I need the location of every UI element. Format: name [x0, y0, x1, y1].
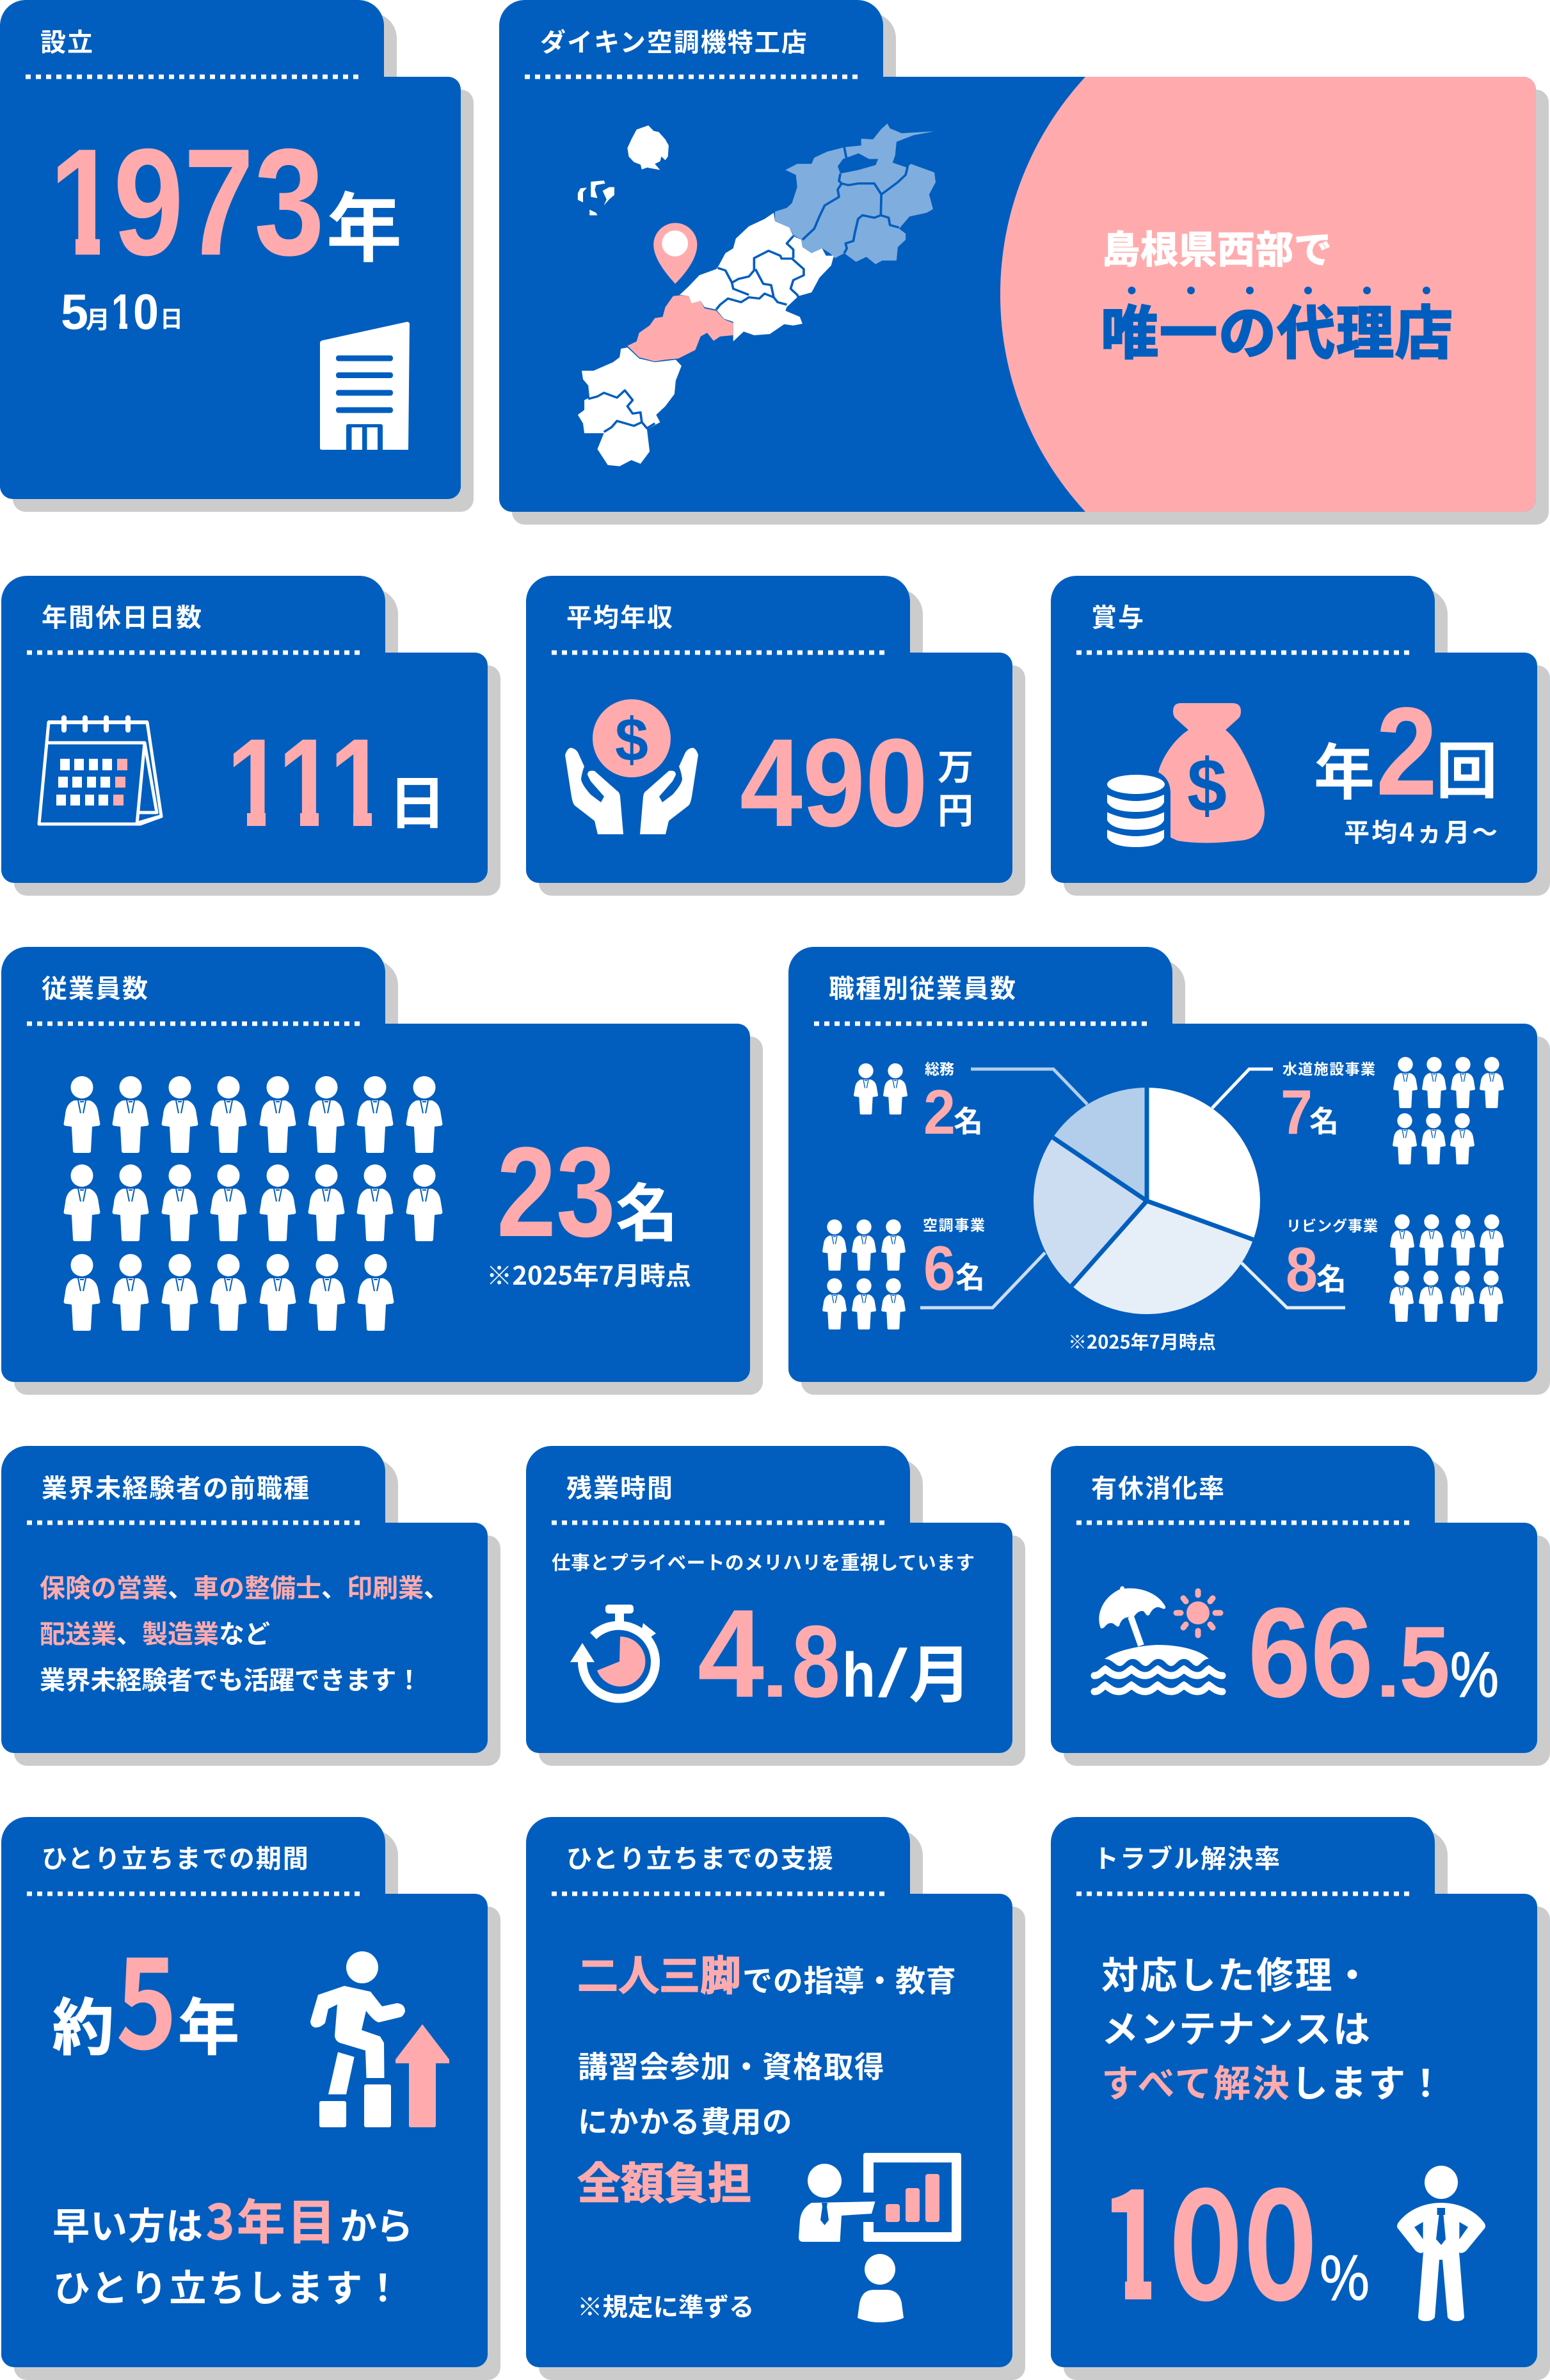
group: air conditioning: 6	[923, 1233, 955, 1303]
group: air conditioning: 名	[955, 1255, 985, 1297]
value 111: 111	[227, 713, 387, 853]
unit people: 名	[616, 1163, 678, 1254]
year 1973	[42, 118, 324, 287]
text: fastest in third year: 早い方は	[52, 2196, 204, 2250]
group: living: リビング事業	[1286, 1214, 1378, 1235]
text: all repairs resolved	[1101, 1946, 1446, 2107]
text: training	[577, 1944, 957, 2003]
value: about five years	[52, 1907, 239, 2084]
text: fastest in third year: ひとり立ちします！	[53, 2258, 403, 2312]
group: living: 名	[1316, 1255, 1346, 1299]
text: all repairs resolved: メンテナンスは	[1101, 1999, 1371, 2053]
body text: 保険の営業、車の整備士、印刷業、	[40, 1567, 449, 1605]
value 100 percent: 1	[1099, 2127, 1167, 2342]
icon: beach umbrella and sun	[1094, 1586, 1222, 1692]
year unit: 年	[326, 168, 402, 277]
text: all repairs resolved: 対応した修理・	[1101, 1946, 1373, 1999]
value 66.5%: %	[1450, 1639, 1499, 1711]
group: living: 8	[1286, 1234, 1318, 1305]
founding date: 月	[86, 300, 110, 335]
pink arc background	[1000, 77, 1536, 512]
heading: paid leave usage: 有休消化率	[1091, 1468, 1226, 1505]
group: general affairs: 名	[954, 1099, 983, 1141]
heading: employees: 従業員数	[42, 968, 149, 1005]
value: twice a year: 回	[1436, 722, 1498, 811]
unit: ten thousand yen: 円	[938, 782, 973, 834]
panel: overtime	[526, 1446, 1025, 1766]
value 4.8h/month: 月	[909, 1624, 971, 1715]
icon: confident person	[1397, 2166, 1485, 2321]
text: all repairs resolved: すべて解決します！	[1101, 2054, 1446, 2107]
group: waterworks: 水道施設事業	[1282, 1057, 1375, 1079]
body text: 配送業、製造業など	[40, 1614, 270, 1651]
panel: time to independence	[1, 1817, 500, 2380]
icon: money bag and coins: $	[1187, 743, 1227, 828]
text: training: 二人三脚	[577, 1944, 741, 2003]
text: fully covered: 全額負担	[577, 2148, 751, 2212]
value 4.8h/month: 8	[792, 1604, 840, 1718]
value: twice a year	[1314, 681, 1498, 821]
value 4.8h/month: 4	[698, 1583, 764, 1724]
value: about five years: 約	[52, 1978, 114, 2067]
callout text: sole dealer: 唯一の代理店	[1101, 287, 1454, 370]
heading: trouble resolution rate: トラブル解決率	[1093, 1838, 1281, 1875]
panel: employees by job type	[788, 947, 1550, 1395]
panel: previous occupations	[1, 1446, 500, 1766]
heading: employees by job type: 職種別従業員数	[829, 968, 1017, 1005]
icon: person climbing steps	[310, 1951, 449, 2127]
panel: support until independence	[526, 1817, 1025, 2380]
icon: calendar	[39, 715, 161, 824]
note: as of July 2025: ※2025年7月時点	[1068, 1328, 1216, 1354]
value 100 percent	[1088, 2127, 1370, 2342]
year 1973: 1	[49, 118, 118, 287]
value 100 percent: %	[1320, 2232, 1370, 2317]
callout text: western Shimane: 島根県西部で	[1102, 219, 1332, 274]
emphasis dots	[1128, 287, 1430, 294]
heading: previous occupations: 業界未経験者の前職種	[42, 1468, 310, 1505]
text: certification costs: にかかる費用の	[578, 2098, 793, 2141]
group: general affairs	[854, 1057, 983, 1147]
icon: stopwatch	[570, 1605, 656, 1699]
group: general affairs: 2	[923, 1077, 955, 1147]
year 1973: 973	[113, 118, 324, 287]
heading: support: ひとり立ちまでの支援	[566, 1838, 835, 1875]
icon: office building	[320, 322, 410, 450]
panel: trouble resolution rate	[1051, 1817, 1550, 2380]
icon: money bag and coins	[1107, 703, 1265, 847]
group: air conditioning: 空調事業	[923, 1213, 985, 1235]
founding date	[61, 283, 183, 340]
value 66.5%: 5	[1399, 1606, 1450, 1718]
body text: 業界未経験者でも活躍できます！	[40, 1660, 422, 1697]
icon: hands holding coin	[565, 699, 698, 834]
value: twice a year: 年	[1314, 724, 1375, 812]
value 66.5%	[1248, 1582, 1499, 1724]
founding date: 0	[133, 283, 159, 340]
value 66.5%: .	[1376, 1628, 1400, 1713]
heading: bonus: 賞与	[1091, 597, 1145, 634]
unit: ten thousand yen	[938, 739, 973, 834]
panel: founding year	[0, 0, 474, 512]
note: per regulations: ※規定に準ずる	[577, 2287, 754, 2324]
note: average four months: 平均4ヵ月〜	[1344, 812, 1498, 849]
founding date: 日	[160, 301, 183, 334]
heading: time to independence: ひとり立ちまでの期間	[42, 1838, 310, 1875]
heading: average income: 平均年収	[566, 597, 674, 634]
panel: bonus	[1051, 576, 1550, 896]
text: certification costs	[578, 2043, 885, 2141]
text: fastest in third year: 3年目	[206, 2184, 338, 2253]
map of Shimane prefecture	[578, 123, 936, 466]
text: training: での指導・教育	[742, 1956, 957, 2001]
value: about five years: 年	[178, 1978, 239, 2067]
panel: paid leave usage	[1051, 1446, 1550, 1766]
icon grid: 23 people	[64, 1076, 443, 1331]
value 66.5%: 66	[1248, 1582, 1373, 1724]
note: as of July 2025: ※2025年7月時点	[486, 1255, 691, 1292]
group: waterworks	[1281, 1057, 1504, 1164]
value 4.8h/month: h	[842, 1640, 875, 1710]
subtext: 仕事とプライベートのメリハリを重視しています	[552, 1548, 975, 1575]
group: waterworks: 7	[1281, 1077, 1313, 1147]
leader lines	[920, 1069, 1345, 1308]
value: twice a year: 2	[1376, 681, 1437, 821]
text: fastest in third year	[52, 2184, 412, 2312]
text: fastest in third year: から	[340, 2196, 412, 2250]
value: about five years: 5	[116, 1907, 177, 2084]
heading: Daikin dealer: ダイキン空調機特工店	[540, 22, 808, 59]
founding date: 5	[61, 283, 88, 340]
pie chart	[1034, 1088, 1260, 1314]
group: general affairs: 総務	[925, 1057, 954, 1079]
icon: presenter with chart	[799, 2153, 961, 2322]
value 100 percent: 00	[1169, 2127, 1318, 2342]
panel: average annual income	[526, 576, 1025, 896]
unit: ten thousand yen: 万	[938, 739, 973, 791]
panel: number of employees	[1, 947, 763, 1395]
text: certification costs: 講習会参加・資格取得	[578, 2043, 885, 2086]
body text	[40, 1567, 449, 1697]
value 4.8h/month: .	[762, 1628, 788, 1713]
group: waterworks: 名	[1309, 1099, 1339, 1141]
value 23: 23	[497, 1121, 616, 1264]
icon: hands holding coin: $	[615, 706, 648, 774]
unit days: 日	[388, 757, 446, 840]
founding date: 1	[111, 283, 132, 340]
value 4.8h/month: /	[878, 1636, 908, 1711]
value 4.8h/month	[698, 1583, 971, 1724]
icon: location pin	[653, 223, 697, 284]
heading: overtime: 残業時間	[566, 1468, 674, 1505]
group: air conditioning	[822, 1213, 985, 1329]
value 490: 490	[740, 713, 928, 853]
heading: annual holidays: 年間休日日数	[42, 597, 203, 634]
panel: Daikin dealer map	[499, 0, 1549, 525]
group: living	[1286, 1214, 1504, 1322]
panel: annual holidays	[1, 576, 500, 896]
heading: founding: 設立	[40, 22, 94, 59]
